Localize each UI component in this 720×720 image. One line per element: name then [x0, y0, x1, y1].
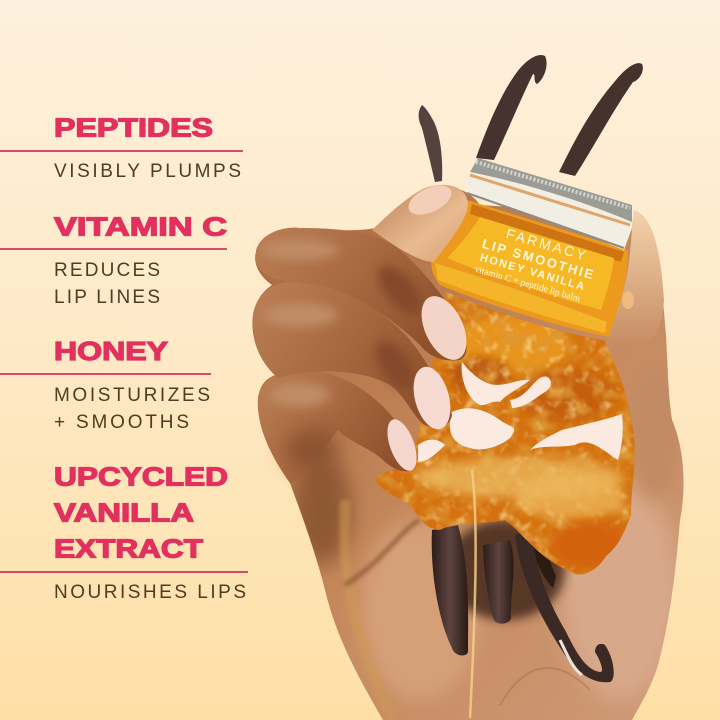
honey film on wrist	[344, 500, 392, 720]
honey drip	[470, 470, 476, 718]
middle finger	[253, 282, 457, 433]
heading: vitamin c: VITAMIN C	[54, 214, 227, 242]
jar body	[431, 200, 628, 337]
jar label panel	[447, 217, 614, 310]
ring finger	[258, 370, 423, 483]
text: reduces lip lines	[54, 260, 160, 308]
heading: upcycled vanilla extract	[54, 464, 228, 564]
text: moisturizes and smooths: MOISTURIZES	[54, 385, 210, 406]
heading: upcycled vanilla extract: EXTRACT	[54, 536, 204, 564]
jar label text: HONEY VANILLA	[478, 252, 587, 294]
product jar	[431, 158, 634, 337]
honey glare highlights	[418, 362, 623, 462]
fingernail: middle	[407, 363, 457, 433]
vanilla pods in palm	[432, 520, 614, 682]
text: reduces lip lines: LIP LINES	[54, 287, 160, 308]
peptides block	[0, 114, 243, 182]
text: visibly plumps: VISIBLY PLUMPS	[54, 161, 241, 182]
ingredient list	[0, 114, 248, 603]
heading: peptides: PEPTIDES	[54, 114, 213, 142]
thumb beside jar	[606, 210, 664, 350]
jar lid	[466, 158, 634, 250]
text: reduces lip lines: REDUCES	[54, 260, 160, 281]
top fingertip holding jar	[372, 179, 468, 262]
fingernail: top	[404, 179, 456, 221]
jar label text: FARMACY	[504, 225, 590, 264]
text: nourishes lips: NOURISHES LIPS	[54, 582, 246, 603]
honeycomb	[370, 290, 640, 580]
jar label text: LIP SMOOTHIE	[480, 236, 597, 283]
hand	[252, 187, 684, 720]
fingernail: ring	[381, 416, 423, 474]
heading: honey: HONEY	[54, 338, 168, 366]
upcycled vanilla block	[0, 464, 248, 603]
jar label text	[473, 220, 602, 307]
heading: upcycled vanilla extract: UPCYCLED	[54, 464, 228, 492]
text: moisturizes and smooths	[54, 385, 210, 433]
fingernail: index	[412, 289, 476, 367]
palm light areas	[360, 520, 480, 700]
jar label text: vitamin C + peptide lip balm	[473, 265, 582, 305]
vitamin c block	[0, 214, 227, 308]
index finger	[256, 228, 476, 367]
vanilla pods above jar	[419, 55, 643, 182]
heading: upcycled vanilla extract: VANILLA	[54, 500, 194, 528]
water droplet	[622, 291, 634, 309]
honey block	[0, 338, 211, 433]
text: moisturizes and smooths: + SMOOTHS	[54, 412, 189, 433]
